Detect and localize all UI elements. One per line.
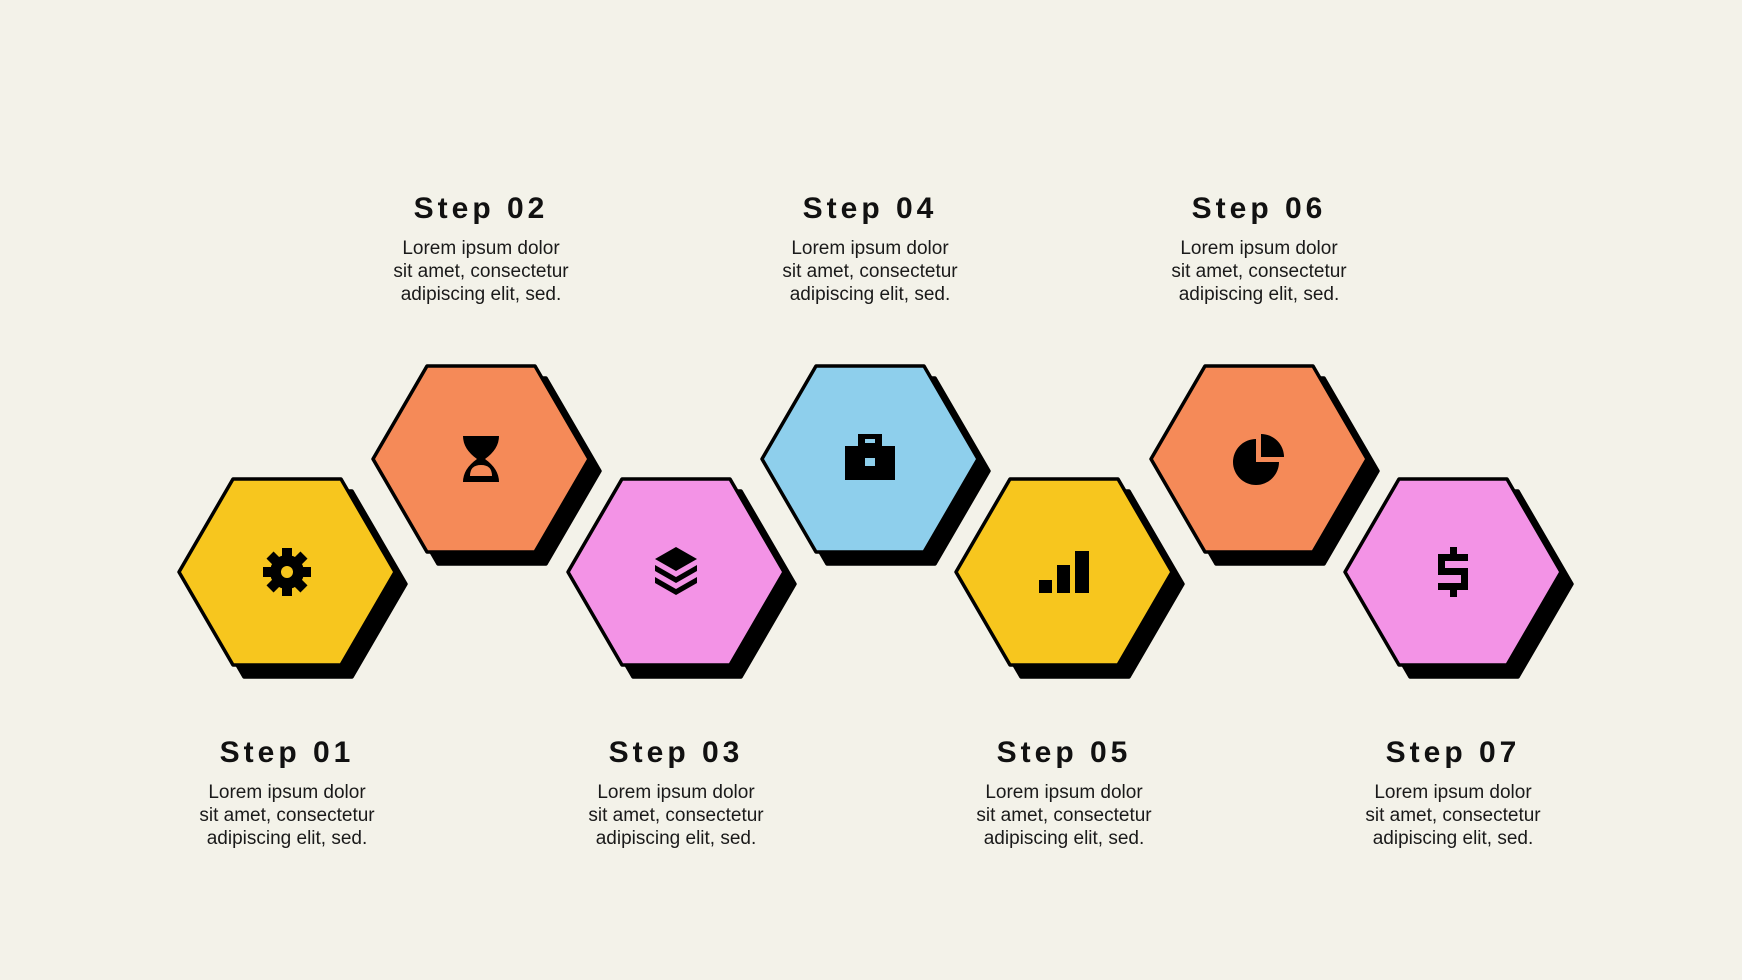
text: step 07: adipiscing elit, sed. — [1373, 828, 1533, 849]
text: step 06: Lorem ipsum dolor — [1180, 238, 1338, 259]
text: step 02: adipiscing elit, sed. — [401, 284, 561, 305]
text: step 04: Step 04 — [803, 192, 937, 225]
icon: layers — [655, 547, 697, 595]
text: step 01 — [199, 736, 375, 849]
step 05 hexagon — [956, 479, 1183, 677]
step 01 hexagon — [179, 479, 406, 677]
text: step 03: adipiscing elit, sed. — [596, 828, 756, 849]
text: step 02 — [393, 192, 569, 305]
icon: briefcase — [845, 434, 895, 480]
icon: bar chart — [1039, 551, 1089, 593]
text: step 05 — [976, 736, 1152, 849]
step 02 hexagon — [373, 366, 600, 564]
icon: dollar — [1438, 547, 1468, 597]
text: step 06: sit amet, consectetur — [1171, 261, 1347, 282]
text: step 04: sit amet, consectetur — [782, 261, 958, 282]
text: step 01: Lorem ipsum dolor — [208, 782, 366, 803]
text: step 07 — [1365, 736, 1541, 849]
text: step 03 — [588, 736, 764, 849]
icon: pie chart — [1233, 434, 1284, 485]
text: step 03: sit amet, consectetur — [588, 805, 764, 826]
text: step 03: Lorem ipsum dolor — [597, 782, 755, 803]
text: step 01: adipiscing elit, sed. — [207, 828, 367, 849]
text: step 04: Lorem ipsum dolor — [791, 238, 949, 259]
icon: hourglass — [463, 436, 499, 482]
text: step 06 — [1171, 192, 1347, 305]
icon: gear — [263, 548, 311, 596]
text: step 02: sit amet, consectetur — [393, 261, 569, 282]
text: step 01: sit amet, consectetur — [199, 805, 375, 826]
text: step 01: Step 01 — [220, 736, 354, 769]
text: step 04 — [782, 192, 958, 305]
text: step 02: Lorem ipsum dolor — [402, 238, 560, 259]
text: step 05: Lorem ipsum dolor — [985, 782, 1143, 803]
text: step 03: Step 03 — [609, 736, 743, 769]
text: step 04: adipiscing elit, sed. — [790, 284, 950, 305]
text: step 05: sit amet, consectetur — [976, 805, 1152, 826]
text: step 07: Step 07 — [1386, 736, 1520, 769]
text: step 02: Step 02 — [414, 192, 548, 225]
text: step 07: Lorem ipsum dolor — [1374, 782, 1532, 803]
text: step 05: Step 05 — [997, 736, 1131, 769]
step 03 hexagon — [568, 479, 795, 677]
text: step 07: sit amet, consectetur — [1365, 805, 1541, 826]
text: step 06: Step 06 — [1192, 192, 1326, 225]
step 04 hexagon — [762, 366, 989, 564]
step 06 hexagon — [1151, 366, 1378, 564]
step 07 hexagon — [1345, 479, 1572, 677]
text: step 06: adipiscing elit, sed. — [1179, 284, 1339, 305]
text: step 05: adipiscing elit, sed. — [984, 828, 1144, 849]
